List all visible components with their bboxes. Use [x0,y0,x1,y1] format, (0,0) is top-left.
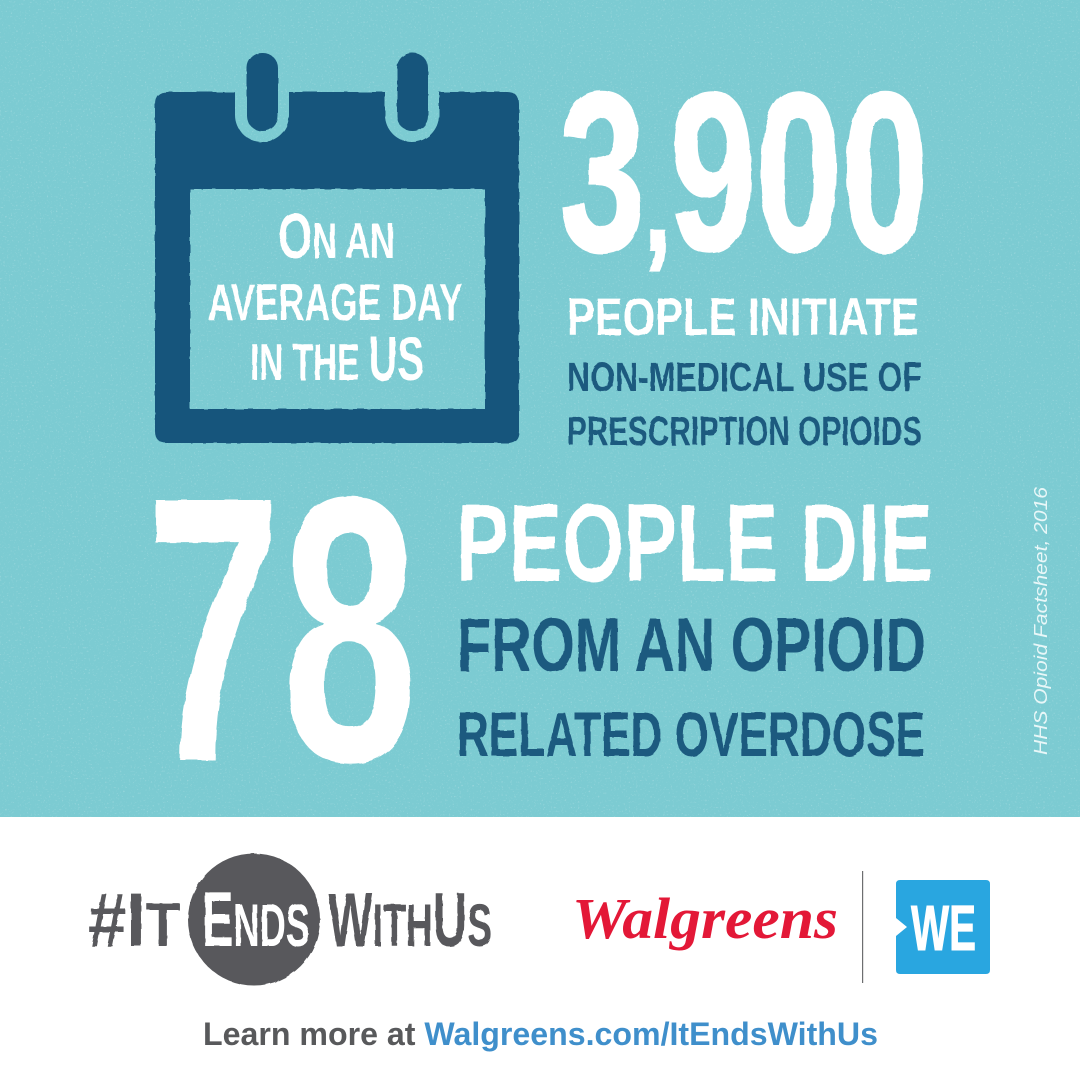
call to action: learn more: Learn more at Walgreens.com/ItEndsWithUs [203,1016,878,1052]
icon: calendar [155,53,519,443]
logo: Walgreens: Walgreens [572,886,838,951]
logo text: #It: #IT [88,878,180,963]
logo: WE [896,880,990,974]
source note: HHS Opioid Factsheet, 2016: HHS Opioid Factsheet, 2016 [1030,486,1051,755]
calendar text: on an average day in the US: ON AN [278,200,395,272]
stat: 3,900: 3,900 [559,45,928,298]
calendar text: on an average day in the US [208,200,463,394]
calendar text: on an average day in the US: IN THE US [250,325,424,394]
text: from an opioid related overdose: FROM AN OPIOID [457,603,926,688]
logo circle [188,854,320,986]
divider between logos [862,871,863,983]
text: non-medical use of prescription opioids: PRESCRIPTION OPIOIDS [567,408,922,454]
text: non-medical use of prescription opioids [567,354,922,454]
logo text: Ends: ENDS [202,875,310,963]
logo text: WithUs: WITHUS [328,878,492,963]
text: from an opioid related overdose [457,603,926,770]
logo: #ItEndsWithUs [88,854,492,986]
text: people initiate: PEOPLE INITIATE [567,288,919,347]
panel: white footer [0,817,1080,1080]
calendar text: on an average day in the US: AVERAGE DAY [208,274,463,332]
panel: teal background [0,0,1080,817]
text: non-medical use of prescription opioids: NON-MEDICAL USE OF [567,354,922,400]
stat: 78: 78 [145,419,418,841]
logo: WE: WE [911,892,976,964]
